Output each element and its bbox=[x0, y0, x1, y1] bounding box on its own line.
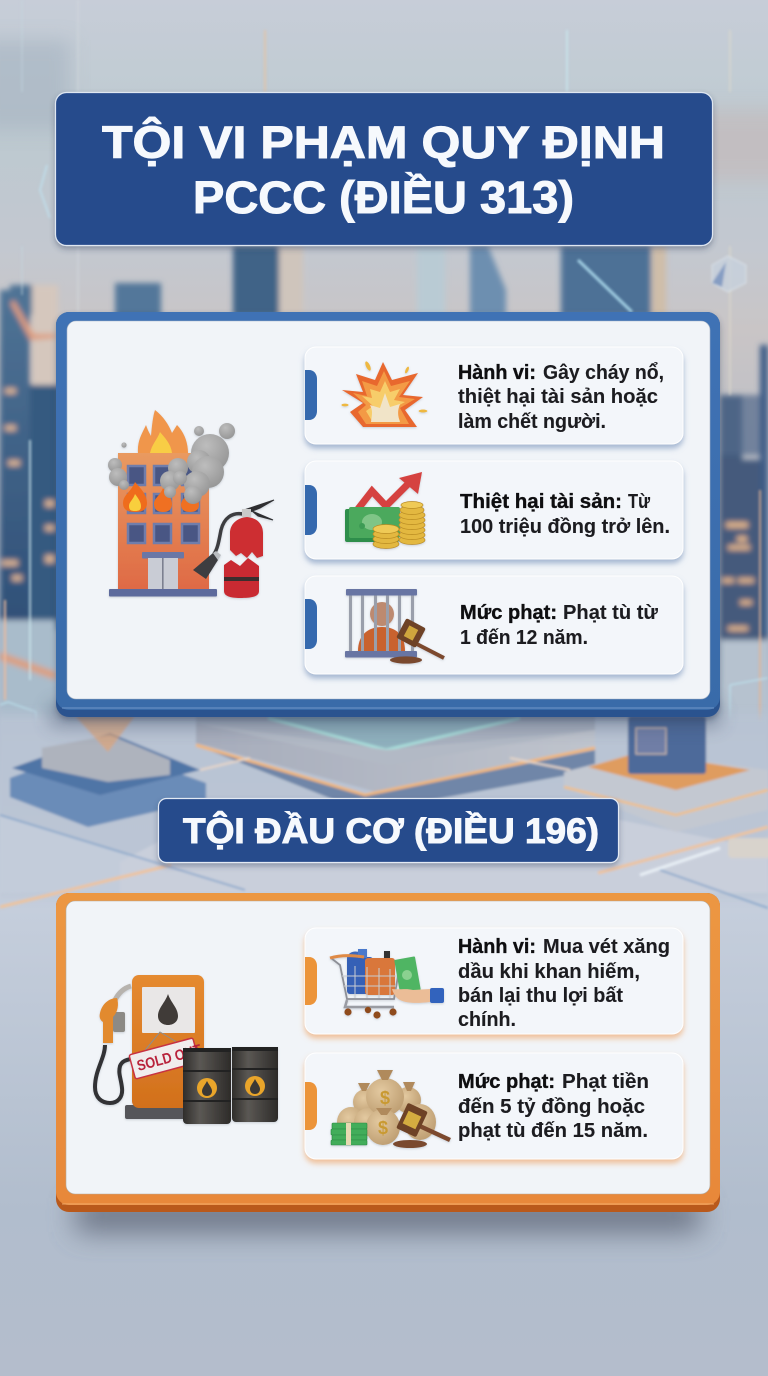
text: hoarding behaviour bbox=[458, 936, 670, 1031]
card: behaviour bbox=[305, 347, 683, 444]
text: behaviour: thiệt hại tài sản hoặc bbox=[458, 386, 658, 408]
text: behaviour: làm chết người. bbox=[458, 411, 606, 433]
text: hoarding behaviour: chính. bbox=[458, 1009, 516, 1031]
accent tab bbox=[305, 485, 317, 535]
text: property damage: Thiệt hại tài sản: bbox=[460, 491, 622, 513]
title banner bbox=[56, 92, 712, 246]
text: hoarding behaviour: bán lại thu lợi bất bbox=[458, 985, 623, 1007]
text: property damage: 100 triệu đồng trở lên. bbox=[460, 516, 670, 538]
text: penalty: Mức phạt: bbox=[460, 602, 557, 624]
accent tab bbox=[305, 370, 317, 420]
soft shadow under lower panel bbox=[76, 1198, 700, 1232]
text: hoarding behaviour: dầu khi khan hiếm, bbox=[458, 961, 640, 983]
text: penalty: Phạt tù từ bbox=[563, 602, 659, 624]
text: speculation penalty: đến 5 tỷ đồng hoặc bbox=[458, 1096, 645, 1118]
icon: burning building with broken extinguisher bbox=[108, 410, 274, 598]
card: penalty bbox=[305, 576, 683, 674]
text: speculation penalty: phạt tù đến 15 năm. bbox=[458, 1120, 648, 1142]
section heading: speculation: TỘI ĐẦU CƠ (ĐIỀU 196) bbox=[183, 811, 599, 851]
text: penalty: 1 đến 12 năm. bbox=[460, 627, 588, 649]
panel: speculation offence bbox=[56, 893, 720, 1212]
text: property damage: Từ bbox=[628, 491, 650, 513]
text: behaviour: Gây cháy nổ, bbox=[543, 362, 664, 384]
card: hoarding behaviour bbox=[305, 928, 683, 1034]
text: speculation penalty: Mức phạt: bbox=[458, 1071, 555, 1093]
icon: shopping cart with fuel cans and cash bbox=[330, 949, 444, 1019]
accent tab bbox=[305, 1082, 317, 1130]
text: behaviour: Hành vi: bbox=[458, 362, 536, 384]
icon: money bags, cash and gavel: $ bbox=[378, 1118, 388, 1138]
card: speculation penalty bbox=[305, 1053, 683, 1159]
icon: money with rising arrow bbox=[345, 472, 425, 548]
accent tab bbox=[305, 957, 317, 1005]
background: platforms and floor bbox=[0, 706, 768, 908]
text: speculation penalty bbox=[458, 1071, 649, 1142]
icon: money bags, cash and gavel: $ bbox=[380, 1088, 390, 1108]
title line 1: TỘI VI PHẠM QUY ĐỊNH bbox=[102, 117, 665, 168]
icon: fuel pump and oil barrels bbox=[95, 975, 278, 1124]
text: hoarding behaviour: Hành vi: bbox=[458, 936, 536, 958]
text: penalty bbox=[460, 602, 659, 649]
panel: fire safety violation bbox=[56, 312, 720, 717]
section heading: speculation bbox=[158, 798, 618, 862]
title line 2: PCCC (ĐIỀU 313) bbox=[193, 172, 574, 223]
card: property damage bbox=[305, 461, 683, 559]
sign text: SOLD OUT bbox=[135, 1041, 203, 1075]
icon: money bags, cash and gavel bbox=[331, 1070, 450, 1148]
text: hoarding behaviour: Mua vét xăng bbox=[543, 936, 670, 958]
hexagon accent bbox=[712, 256, 746, 292]
icon: explosion bbox=[341, 361, 427, 427]
text: behaviour bbox=[458, 362, 664, 433]
text: speculation penalty: Phạt tiền bbox=[562, 1071, 649, 1093]
accent tab bbox=[305, 599, 317, 649]
text: property damage bbox=[460, 491, 670, 538]
icon: prison bars and gavel bbox=[345, 589, 444, 664]
